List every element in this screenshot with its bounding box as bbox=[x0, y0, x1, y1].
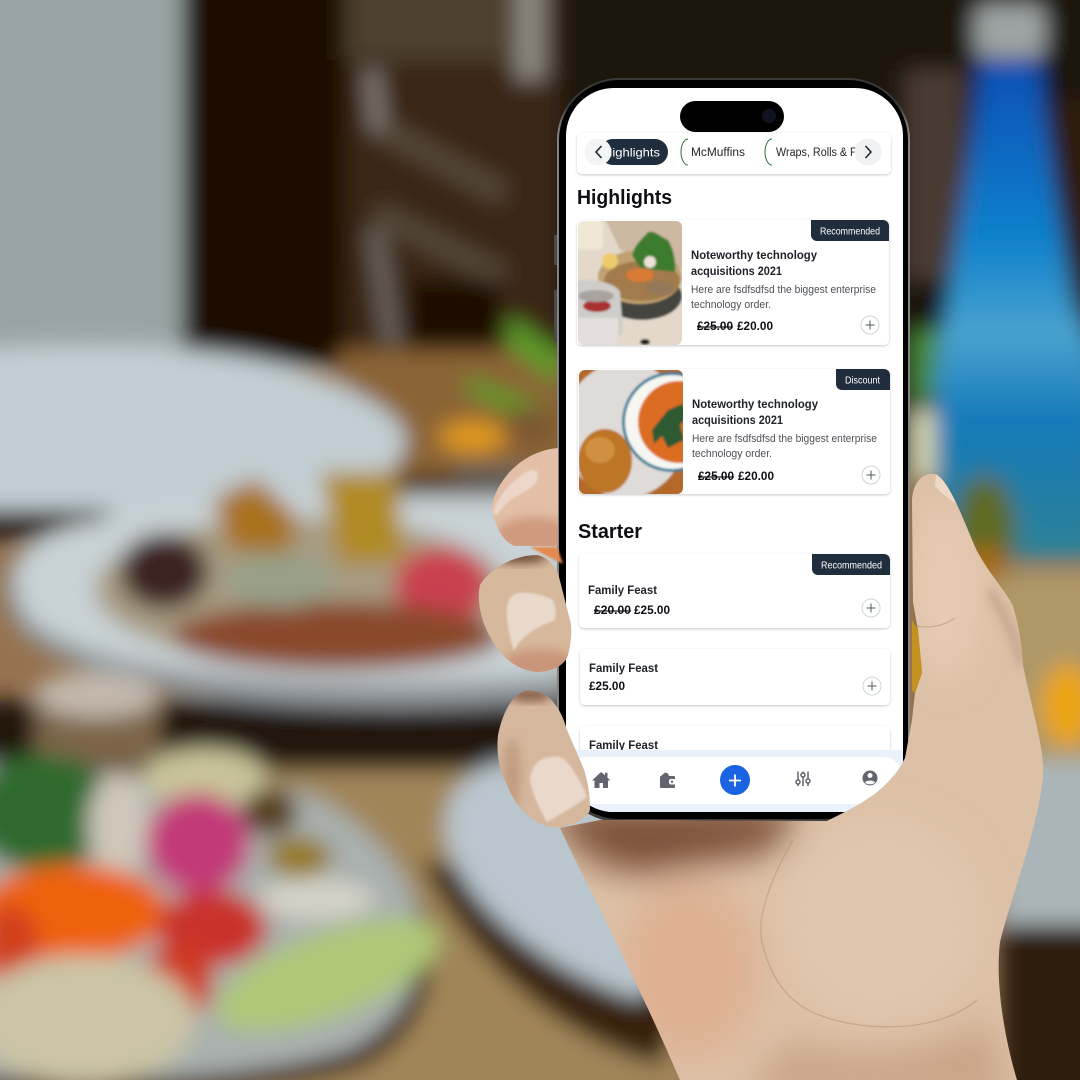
category navigation bar bbox=[577, 133, 891, 174]
thumb nail tip bbox=[935, 474, 958, 505]
dark wooden post bbox=[190, 0, 345, 365]
menu card 2 bbox=[563, 362, 890, 498]
item title bbox=[692, 399, 819, 427]
shadow under the phone bbox=[540, 805, 800, 875]
chair: white woven back bbox=[0, 0, 182, 355]
active category pill bbox=[600, 139, 668, 165]
plate bottom right, behind the hand bbox=[420, 740, 720, 1065]
salad on plate behind the phone bbox=[439, 315, 565, 480]
price: £25.00 bbox=[589, 681, 625, 693]
badge: Discount bbox=[836, 369, 890, 390]
item description bbox=[691, 284, 876, 311]
item description: technology order. bbox=[691, 299, 771, 311]
price bbox=[594, 606, 670, 614]
price: £20.00 bbox=[594, 605, 631, 617]
table behind hand on the right bbox=[940, 570, 1080, 760]
icon: wallet bbox=[660, 772, 676, 788]
lower palm shading bbox=[740, 1020, 1010, 1080]
price: £20.00 bbox=[737, 321, 773, 333]
index finger bbox=[485, 440, 575, 553]
item name: Family Feast bbox=[588, 585, 657, 597]
thumb highlight bbox=[915, 505, 975, 675]
thumb outer knuckle shade bbox=[990, 590, 1022, 665]
add button, blue bbox=[720, 765, 750, 795]
phone side buttons bbox=[554, 235, 558, 342]
smartphone bbox=[554, 78, 910, 822]
table lower left bbox=[0, 700, 590, 775]
heading: Starter: Starter bbox=[578, 521, 642, 543]
right arrow button bbox=[854, 138, 882, 166]
yellow gap between thumb and palm bbox=[912, 620, 922, 693]
menu card 1 bbox=[575, 219, 889, 348]
item title: acquisitions 2021 bbox=[691, 266, 783, 278]
peach palm side bbox=[620, 880, 760, 1060]
phone screen bbox=[563, 88, 903, 815]
small sauce cup bbox=[35, 672, 160, 765]
middle finger bbox=[475, 549, 578, 681]
badge: Recommended: Recommended bbox=[820, 226, 880, 238]
badge: Discount: Discount bbox=[845, 376, 880, 386]
chair: dark wooden slats bbox=[345, 0, 560, 360]
thumb mound bbox=[780, 820, 980, 1020]
item name: Family Feast bbox=[589, 740, 658, 752]
category: Wraps, Rolls: Wraps, Rolls & Fries bbox=[776, 147, 874, 159]
active category pill: Highlights bbox=[603, 146, 660, 160]
item title: Noteworthy technology bbox=[692, 399, 819, 411]
orange backdrop between fingers bbox=[530, 547, 563, 564]
icon: home bbox=[592, 772, 610, 788]
badge: Recommended bbox=[811, 220, 889, 241]
heading: Highlights: Highlights bbox=[577, 187, 672, 209]
category: McMuffins bbox=[681, 139, 745, 165]
plate on the right edge bbox=[1000, 663, 1080, 1080]
greens and cream behind the thumb bbox=[912, 330, 942, 400]
middle plate with food bbox=[4, 472, 570, 708]
item description bbox=[692, 433, 877, 460]
background above and right of the phone bbox=[560, 0, 1080, 480]
add button bbox=[861, 316, 879, 334]
starter card 3, partly hidden bbox=[578, 726, 892, 750]
badge: Recommended: Recommended bbox=[821, 560, 882, 572]
table behind the phone bbox=[340, 350, 580, 480]
item description: Here are fsdfsdfsd the biggest enterprise bbox=[692, 433, 877, 445]
item name: Family Feast bbox=[589, 663, 658, 675]
starter card 1 bbox=[579, 554, 890, 628]
front plate with vegetables bbox=[0, 748, 453, 1080]
price: £25.00 bbox=[698, 471, 734, 483]
blue water bottle bbox=[935, 5, 1080, 585]
icon: sliders bbox=[796, 772, 810, 786]
price: £20.00 bbox=[738, 471, 774, 483]
item title bbox=[691, 250, 818, 278]
ring fingernail bbox=[530, 757, 587, 822]
bottom navigation bar bbox=[566, 750, 903, 815]
plate top left bbox=[0, 346, 406, 530]
item description: technology order. bbox=[692, 448, 772, 460]
item title: Noteworthy technology bbox=[691, 250, 818, 262]
icon: profile bbox=[862, 770, 878, 786]
add button bbox=[862, 599, 880, 617]
category: McMuffins: McMuffins bbox=[691, 147, 745, 159]
index fingernail bbox=[493, 470, 538, 515]
item title: acquisitions 2021 bbox=[692, 415, 784, 427]
starter card 2 bbox=[580, 649, 890, 705]
phone frame bbox=[557, 78, 910, 822]
price: £25.00 bbox=[697, 321, 733, 333]
category: Wraps, Rolls bbox=[764, 138, 856, 166]
ring finger bbox=[490, 685, 595, 830]
food photo: grain bowl bbox=[575, 219, 684, 348]
left arrow button bbox=[584, 138, 612, 166]
middle fingernail bbox=[507, 593, 556, 651]
hand holding the phone bbox=[475, 440, 1060, 1080]
food photo: soup and bun bbox=[579, 370, 683, 494]
add button bbox=[862, 466, 880, 484]
badge: Recommended bbox=[812, 554, 890, 575]
palm creases bbox=[761, 618, 977, 1027]
price bbox=[698, 472, 774, 480]
price: £25.00 bbox=[634, 605, 670, 617]
dynamic island bbox=[680, 101, 784, 132]
add button bbox=[863, 677, 881, 695]
palm and thumb bbox=[540, 460, 1060, 1080]
price bbox=[697, 322, 773, 330]
item description: Here are fsdfsdfsd the biggest enterprise bbox=[691, 284, 876, 296]
